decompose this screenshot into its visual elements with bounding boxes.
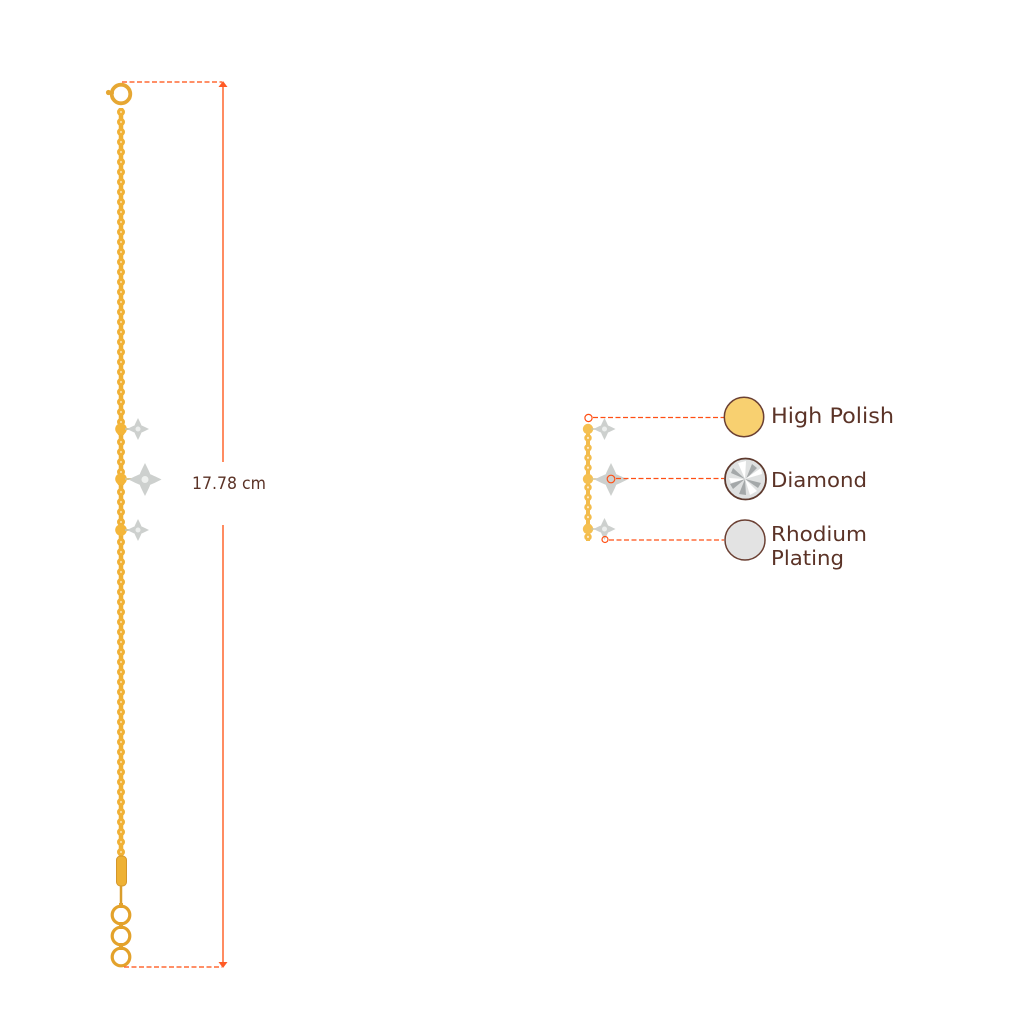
engraved tag — [116, 856, 126, 886]
mini star middle — [591, 463, 628, 496]
star charm bottom — [125, 519, 149, 541]
label: rhodium plating — [771, 522, 867, 570]
mini chain — [586, 428, 590, 541]
mini star top — [591, 418, 616, 440]
swatch: rhodium plating — [725, 520, 765, 560]
label: rhodium plating: Rhodium — [771, 522, 867, 546]
swatch: diamond — [725, 458, 766, 500]
swatch: high polish — [724, 397, 764, 437]
length label: 17.78 cm — [192, 474, 266, 494]
connector — [120, 886, 122, 904]
chain — [119, 108, 123, 856]
label: diamond: Diamond — [771, 468, 867, 492]
star charm middle — [125, 463, 162, 496]
callout markers and leader lines — [585, 414, 724, 542]
mini bracelet diagram — [583, 418, 628, 541]
large charm links — [115, 423, 127, 536]
mini star bottom — [591, 518, 616, 540]
bracelet — [106, 85, 162, 966]
spring clasp — [106, 85, 130, 103]
star charm top — [125, 418, 149, 440]
dimension line — [122, 81, 228, 968]
label: high polish: High Polish — [771, 404, 894, 428]
mini charm links — [583, 424, 593, 534]
label: rhodium plating: Plating — [771, 546, 844, 570]
extension rings — [112, 903, 130, 966]
